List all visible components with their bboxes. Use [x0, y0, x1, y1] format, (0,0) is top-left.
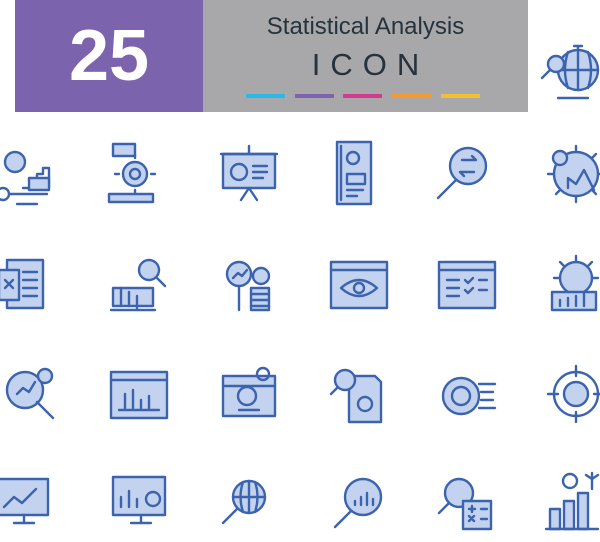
- icon: globe stopwatch: [540, 44, 600, 100]
- icon: monitor chart: [0, 478, 50, 524]
- icon: browser checklist: [438, 260, 496, 310]
- icon: search gear: [6, 368, 54, 420]
- icon: target dollar: [546, 364, 600, 424]
- icon: search globe: [222, 480, 266, 524]
- icon: search exchange: [436, 146, 488, 200]
- icon: bar chart search: [110, 258, 166, 312]
- icon: magnifier coins: [226, 260, 270, 312]
- icon: gear dollar chart: [546, 144, 600, 204]
- header: purple number panel: [15, 0, 203, 112]
- title: Statistical Analysis: [267, 13, 464, 40]
- icon: search bars: [334, 478, 382, 528]
- icon: gear pencil: [108, 142, 156, 204]
- header: purple number panel: 25: [69, 16, 149, 96]
- icon: coin speed: [442, 376, 496, 416]
- icon: search document: [330, 368, 382, 424]
- icon: key chart: [0, 150, 50, 206]
- icon: search calculator: [438, 478, 492, 530]
- icon: monitor gear: [112, 476, 166, 524]
- icon: browser eye: [330, 260, 388, 310]
- icon: tablet gear: [222, 366, 276, 418]
- colour bars: [246, 94, 480, 98]
- icon: browser chart: [110, 370, 168, 420]
- icon: presentation board: [220, 144, 278, 202]
- icon: gear cloud chart: [550, 254, 600, 312]
- subtitle: ICON: [312, 47, 429, 82]
- icon: spreadsheet cancel: [0, 258, 44, 310]
- icon: growth bars: [544, 472, 600, 530]
- icon: report document: [336, 140, 372, 206]
- header: grey title panel: [203, 0, 528, 112]
